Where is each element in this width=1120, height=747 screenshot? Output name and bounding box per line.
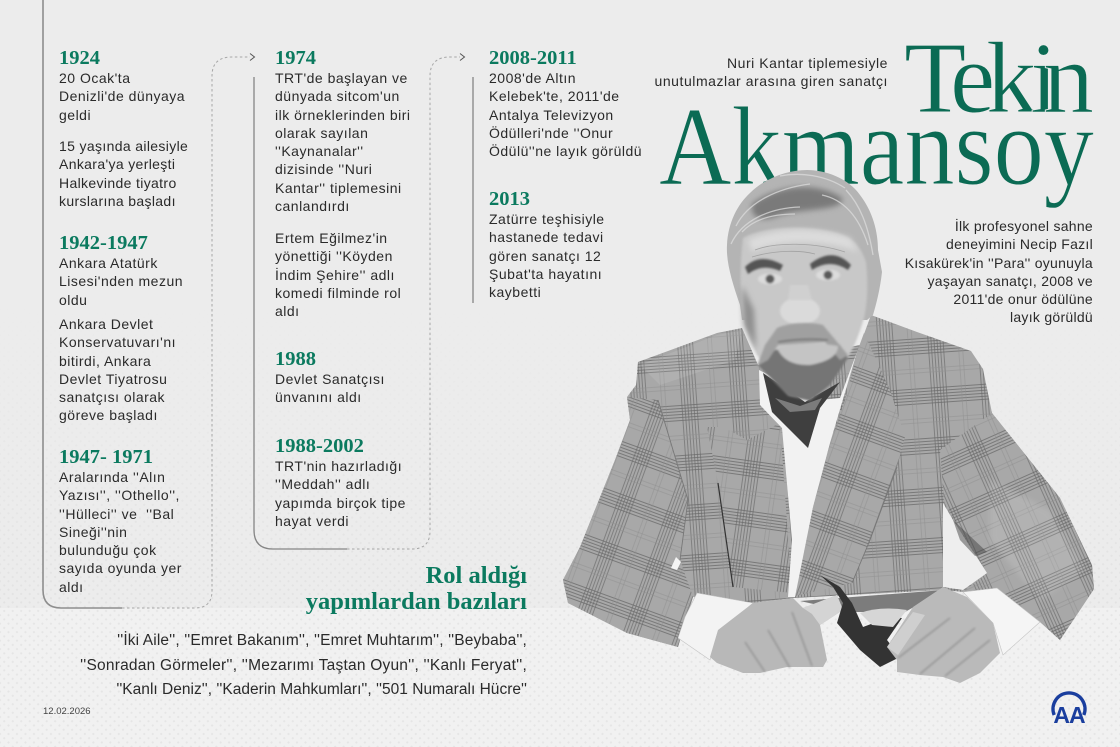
year 2013: 2013 — [489, 188, 530, 210]
right hand — [860, 587, 1000, 683]
text Meddah — [275, 458, 406, 529]
eyebrows — [745, 259, 783, 274]
text oyunlar: sayıda oyunda yer — [59, 560, 182, 576]
year 1924: 1924 — [59, 47, 100, 69]
text oyunlar: Yazısı'', ''Othello'', — [59, 487, 180, 503]
text film: yönettiği ''Köyden — [275, 248, 393, 264]
year 1988-2002: 1988-2002 — [275, 435, 364, 457]
gap between arm and torso — [943, 503, 987, 590]
text 2008: Ödülü''ne layık görüldü — [489, 143, 642, 159]
text Meddah: hayat verdi — [275, 513, 349, 529]
text konservatuvar: bitirdi, Ankara — [59, 352, 151, 368]
text 1924 birth: geldi — [59, 106, 91, 122]
text 2013: kaybetti — [489, 284, 541, 300]
column 3 timeline — [489, 47, 642, 300]
text 2008: 2008'de Altın — [489, 70, 576, 86]
text 2013: Zatürre teşhisiyle — [489, 211, 605, 227]
text TRT sitcom: ''Kaynanalar'' — [275, 143, 364, 159]
year 2008-2011: 2008-2011 — [489, 47, 577, 69]
text TRT sitcom: Kantar'' tiplemesini — [275, 180, 402, 196]
hair — [727, 170, 882, 320]
right biography text: yaşayan sanatçı, 2008 ve — [928, 273, 1093, 289]
face — [741, 228, 867, 398]
text film: komedi filminde rol — [275, 285, 401, 301]
right biography text: layık görüldü — [1010, 309, 1093, 325]
text konservatuvar: Ankara Devlet — [59, 316, 153, 332]
icon: AA logo — [1051, 691, 1087, 725]
subtitle: unutulmazlar arasına giren sanatçı — [654, 73, 888, 89]
right biography text: deneyimini Necip Fazıl — [946, 236, 1093, 252]
text film: aldı — [275, 303, 300, 319]
list of productions: ''İki Aile'', ''Emret Bakanım'', ''Emret Muhtarım'', ''Beybaba'', — [117, 632, 527, 649]
text TRT sitcom: olarak sayılan — [275, 125, 368, 141]
subtitle: Nuri Kantar tiplemesiyle — [727, 55, 888, 71]
text oyunlar: Aralarında ''Alın — [59, 469, 165, 485]
text 1988 — [275, 371, 385, 405]
text Meddah: yapımda birçok tipe — [275, 494, 406, 510]
text TRT sitcom: TRT'de başlayan ve — [275, 70, 408, 86]
text 2008: Ödülleri'nde ''Onur — [489, 125, 613, 141]
text lise: oldu — [59, 292, 87, 308]
year 1947-1971: 1947- 1971 — [59, 446, 153, 468]
text TRT sitcom: ilk örneklerinden biri — [275, 106, 411, 122]
text lise: Ankara Atatürk — [59, 255, 158, 271]
left hand — [710, 595, 843, 673]
text oyunlar — [59, 469, 182, 594]
list of productions: ''Kanlı Deniz'', ''Kaderin Mahkumları'', ''501 Numaralı Hücre'' — [116, 681, 527, 698]
text konservatuvar — [59, 316, 176, 423]
text 2008 — [489, 70, 642, 159]
text 2013: Şubat'ta hayatını — [489, 266, 602, 282]
heading: roles: yapımlardan bazıları — [306, 588, 527, 615]
beard and moustache — [757, 323, 848, 401]
list of productions — [80, 631, 527, 698]
text 2013: gören sanatçı 12 — [489, 248, 601, 264]
heading: roles — [306, 562, 527, 615]
text TRT sitcom: canlandırdı — [275, 198, 350, 214]
right biography text: İlk profesyonel sahne — [955, 218, 1093, 234]
text 1924 Ankara: Ankara'ya yerleşti — [59, 156, 175, 172]
text oyunlar: bulunduğu çok — [59, 542, 157, 558]
text 1924 Ankara: kurslarına başladı — [59, 193, 176, 209]
pipe — [820, 575, 902, 667]
year 1974: 1974 — [275, 47, 316, 69]
list of productions: ''Sonradan Görmeler'', ''Mezarımı Taştan Oyun'', ''Kanlı Feryat'', — [80, 656, 527, 674]
text 2008: Kelebek'te, 2011'de — [489, 88, 620, 104]
text film — [275, 230, 401, 319]
text 1924 Ankara: 15 yaşında ailesiyle — [59, 138, 188, 154]
jacket — [563, 315, 1094, 647]
text 1924 birth: Denizli'de dünyaya — [59, 88, 185, 104]
text 2013 — [489, 211, 605, 300]
nose — [780, 297, 820, 325]
shirt — [759, 352, 857, 597]
text 1924 Ankara — [59, 138, 188, 209]
text lise — [59, 255, 183, 308]
right lapel — [795, 333, 905, 596]
text 2008: Antalya Televizyon — [489, 106, 614, 122]
right biography text: Kısakürek'in ''Para'' oyunuyla — [905, 254, 1093, 270]
text TRT sitcom — [275, 70, 411, 214]
year 1988: 1988 — [275, 348, 316, 370]
right sleeve — [940, 413, 1094, 640]
text Meddah: ''Meddah'' adlı — [275, 476, 370, 492]
text 2013: hastanede tedavi — [489, 229, 604, 245]
text 1924 birth — [59, 70, 185, 123]
left cuff — [678, 593, 753, 660]
text oyunlar: Sineği''nin — [59, 524, 127, 540]
text konservatuvar: Devlet Tiyatrosu — [59, 371, 167, 387]
date: 12.02.2026 — [43, 706, 91, 717]
text konservatuvar: göreve başladı — [59, 407, 158, 423]
left sleeve — [563, 397, 693, 647]
right cuff — [963, 588, 1040, 655]
text oyunlar: aldı — [59, 578, 84, 594]
right biography text — [905, 218, 1093, 325]
text konservatuvar: sanatçısı olarak — [59, 389, 165, 405]
column 2 timeline — [275, 47, 411, 529]
text film: Ertem Eğilmez'in — [275, 230, 388, 246]
text konservatuvar: Konservatuvarı'nı — [59, 334, 176, 350]
text 1924 Ankara: Halkevinde tiyatro — [59, 174, 177, 190]
text film: İndim Şehire'' adlı — [275, 266, 395, 282]
text oyunlar: ''Hülleci'' ve ''Bal — [59, 506, 174, 522]
text lise: Lisesi'nden mezun — [59, 273, 183, 289]
text 1988: ünvanını aldı — [275, 389, 362, 405]
year 1942-1947: 1942-1947 — [59, 232, 148, 254]
text 1988: Devlet Sanatçısı — [275, 371, 385, 387]
cravat — [763, 373, 840, 448]
right biography text: 2011'de onur ödülüne — [953, 291, 1093, 307]
left lapel — [707, 423, 792, 593]
text TRT sitcom: dünyada sitcom'un — [275, 88, 400, 104]
eyes — [758, 270, 840, 284]
title: Tekin — [904, 22, 1094, 135]
subtitle — [654, 55, 888, 89]
column 1 timeline — [59, 47, 188, 594]
heading: roles: Rol aldığı — [426, 562, 527, 589]
text 1924 birth: 20 Ocak'ta — [59, 70, 130, 86]
text TRT sitcom: dizisinde ''Nuri — [275, 161, 372, 177]
text Meddah: TRT'nin hazırladığı — [275, 458, 402, 474]
